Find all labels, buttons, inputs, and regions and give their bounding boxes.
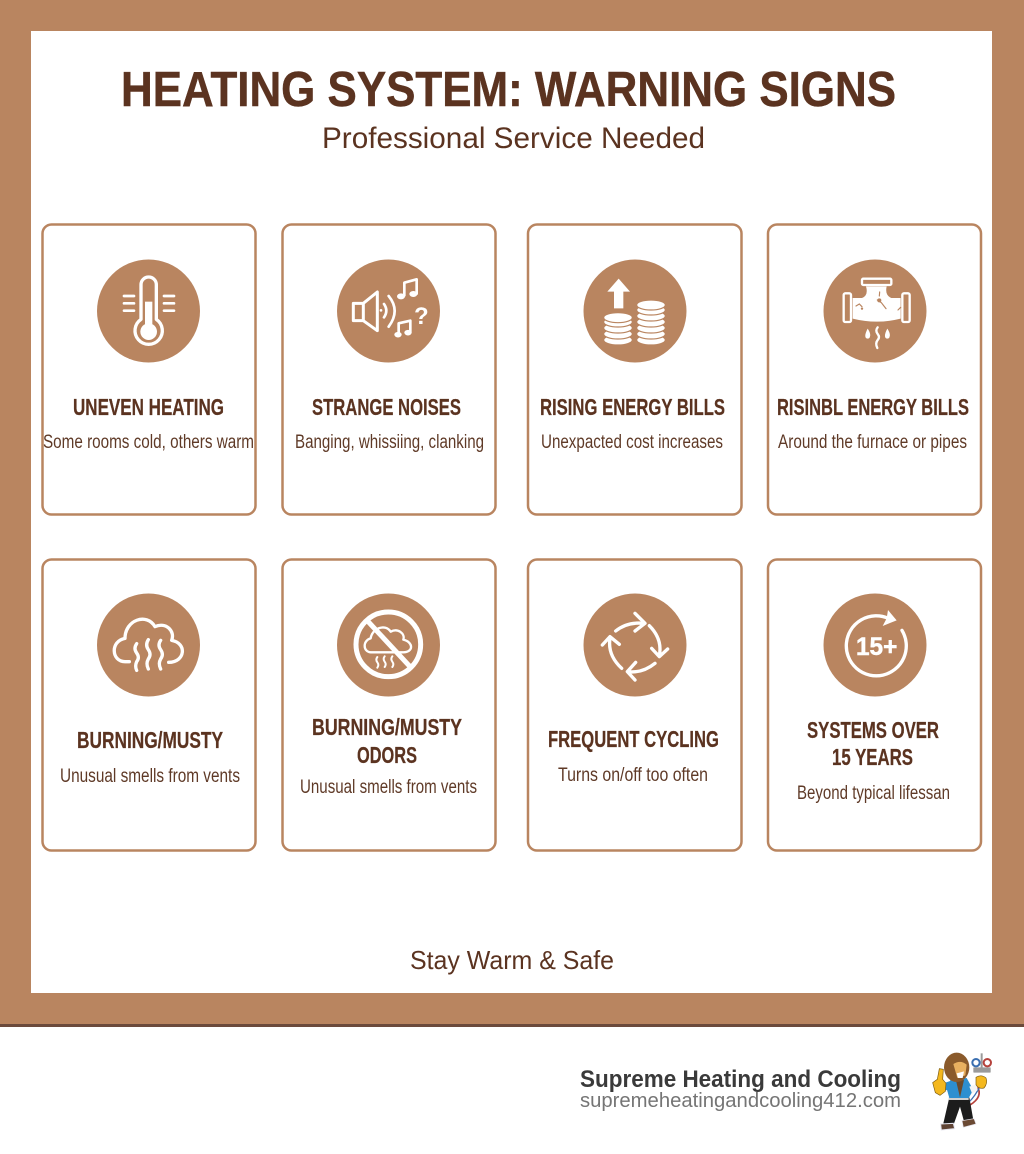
heading: STRANGE NOISES <box>312 394 461 420</box>
heading: ODORS <box>357 742 417 768</box>
description: Unusual smells from vents <box>300 777 477 798</box>
heading: BURNING/MUSTY <box>77 727 223 753</box>
panel: rising energy bills <box>528 224 742 514</box>
icon: speaker and notes <box>337 260 440 362</box>
icon: coins and arrow <box>584 260 686 362</box>
heading: FREQUENT CYCLING <box>548 726 719 752</box>
description: Around the furnace or pipes <box>778 432 967 453</box>
icon: 15+ with arrow: 15+ <box>856 634 897 661</box>
icon: leaking pipe <box>824 260 926 362</box>
subtitle: Professional Service Needed <box>322 122 705 155</box>
panel: uneven heating <box>42 224 256 514</box>
panel: systems over 15 years <box>768 560 981 850</box>
panel: frequent cycling <box>528 560 742 850</box>
icon: thermometer <box>97 260 200 362</box>
icon: crossed-out cloud <box>337 594 440 696</box>
heading: 15 YEARS <box>832 744 913 770</box>
description: Banging, whissiing, clanking <box>295 432 484 453</box>
heading: SYSTEMS OVER <box>807 717 939 743</box>
description: Turns on/off too often <box>558 765 708 786</box>
icon: 15+ with arrow <box>824 594 926 696</box>
white content panel <box>31 31 992 993</box>
icon: speaker and notes: ? <box>414 303 429 330</box>
heading <box>807 717 939 770</box>
panel: risinbl energy bills <box>768 224 981 514</box>
heading: BURNING/MUSTY <box>312 714 462 740</box>
description: Some rooms cold, others warm <box>43 432 254 453</box>
title: HEATING SYSTEM: WARNING SIGNS <box>121 63 896 117</box>
description: Beyond typical lifessan <box>797 783 950 804</box>
description: Unusual smells from vents <box>60 766 240 787</box>
heading <box>312 714 462 768</box>
closing tagline: Stay Warm & Safe <box>410 945 614 975</box>
icon: lion mascot <box>933 1053 991 1130</box>
icon: cycle arrows <box>584 594 686 696</box>
panel: strange noises <box>282 224 496 514</box>
company name: Supreme Heating and Cooling <box>580 1066 901 1093</box>
description: Unexpacted cost increases <box>541 432 723 453</box>
icon: cloud with vapour <box>97 594 200 696</box>
heading: RISING ENERGY BILLS <box>540 394 725 420</box>
company website: supremeheatingandcooling412.com <box>580 1090 901 1112</box>
panel: burning/musty <box>42 560 256 850</box>
heading: UNEVEN HEATING <box>73 394 224 420</box>
panel: burning/musty odors <box>282 560 496 850</box>
